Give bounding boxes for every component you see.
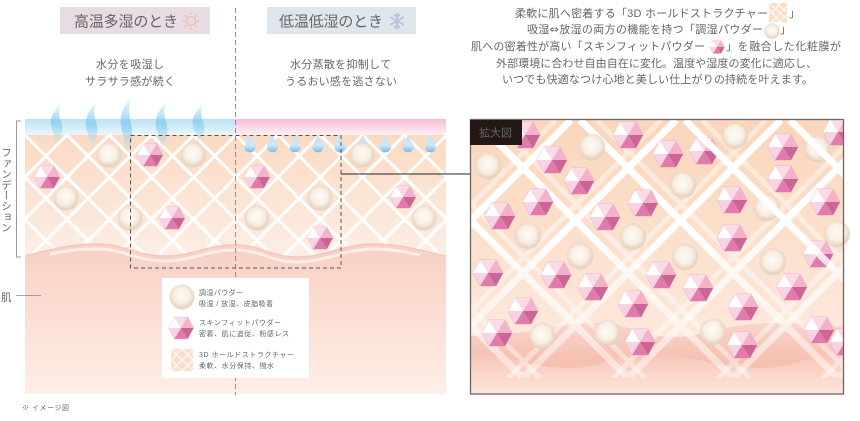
text: intro paragraph: 肌への密着性が高い「スキンフィットパウダー [471, 39, 705, 53]
band: dry pink [236, 119, 446, 135]
legend: skin-fit powder [169, 317, 289, 339]
spheres behind lattice [510, 122, 851, 267]
legend: 3D hold structure: 3D ホールドストラクチャー [199, 351, 294, 359]
text: hot and humid description [85, 58, 175, 88]
icon: rising moisture wisps [51, 95, 204, 157]
icon: inline hexagon [710, 40, 724, 54]
icon: sun [182, 12, 200, 30]
header: cold and dry: 低温低湿のとき [279, 14, 383, 30]
text: intro paragraph [471, 3, 841, 86]
text: intro paragraph: いつでも快適なつけ心地と美しい仕上がりの持続を叶えます。 [502, 72, 813, 86]
primary white lattice [471, 120, 843, 378]
text: hot and humid description: 水分を吸湿し [96, 58, 164, 71]
text: hot and humid description: サラサラ感が続く [85, 74, 175, 88]
connector line [341, 173, 470, 175]
text: cold and dry description: うるおい感を逃さない [285, 74, 397, 88]
text: intro paragraph: 」 [789, 8, 800, 20]
icon: inline lattice [769, 3, 787, 22]
panel: magnified view [470, 118, 850, 395]
text: intro paragraph: 外部環境に合わせ自由自在に変化。温度や湿度の変化に適応し、 [496, 56, 817, 70]
magnified frame border [470, 120, 844, 394]
magnify frame [130, 136, 341, 268]
3D hold structure lattice [25, 135, 446, 256]
legend: conditioning powder [169, 284, 273, 310]
panel: skin and foundation diagram [24, 96, 446, 394]
legend: 3D hold structure: 柔軟、水分保持、撥水 [199, 361, 274, 370]
skin-fit powder hexagons [34, 144, 416, 249]
magnified hexagons [473, 119, 860, 358]
legend: 3D hold structure [171, 349, 294, 371]
skin layer [25, 244, 446, 394]
divider: center dashed line [234, 8, 236, 395]
header: cold and dry [267, 7, 416, 34]
note: image diagram: ※ イメージ図 [22, 404, 69, 412]
legend: conditioning powder: 吸湿 / 放湿、皮脂吸着 [199, 299, 273, 308]
icon: inline sphere [764, 23, 780, 39]
icon: moisture droplets [244, 134, 436, 152]
label: foundation bracket [0, 121, 21, 257]
legend: skin-fit powder: スキンフィットパウダー [199, 318, 281, 327]
text: cold and dry description: 水分蒸散を抑制して [290, 57, 391, 71]
text: intro paragraph: 」 [780, 24, 791, 36]
magnified spheres [474, 122, 787, 350]
conditioning powder spheres [53, 142, 437, 231]
legend: conditioning powder: 調湿パウダー [199, 288, 243, 297]
magnified skin layers [471, 323, 843, 386]
magnified background [471, 120, 843, 394]
header: hot and humid [60, 7, 210, 34]
legend: skin-fit powder: 密着、肌に追従、粉感レス [199, 329, 289, 338]
label: skin: 肌 [1, 292, 12, 304]
foundation layer [25, 135, 446, 260]
label: foundation bracket: ファンデーション [0, 147, 12, 233]
secondary pale lattice [471, 120, 843, 378]
label: skin [1, 292, 41, 304]
header: hot and humid: 高温多湿のとき [74, 12, 178, 30]
text: intro paragraph: 」を融合した化粧膜が [726, 39, 841, 53]
text: intro paragraph: 柔軟に肌へ密着する「3D ホールドストラクチャー [515, 6, 768, 20]
band: humidity blue [25, 119, 236, 135]
label: magnified view [470, 120, 522, 145]
legend [162, 278, 309, 378]
text: cold and dry description [285, 57, 397, 88]
label: magnified view: 拡大図 [479, 126, 512, 140]
icon: snowflake [390, 13, 404, 29]
text: intro paragraph: 吸湿⇔放湿の両方の機能を持つ「調湿パウダー [527, 22, 763, 36]
